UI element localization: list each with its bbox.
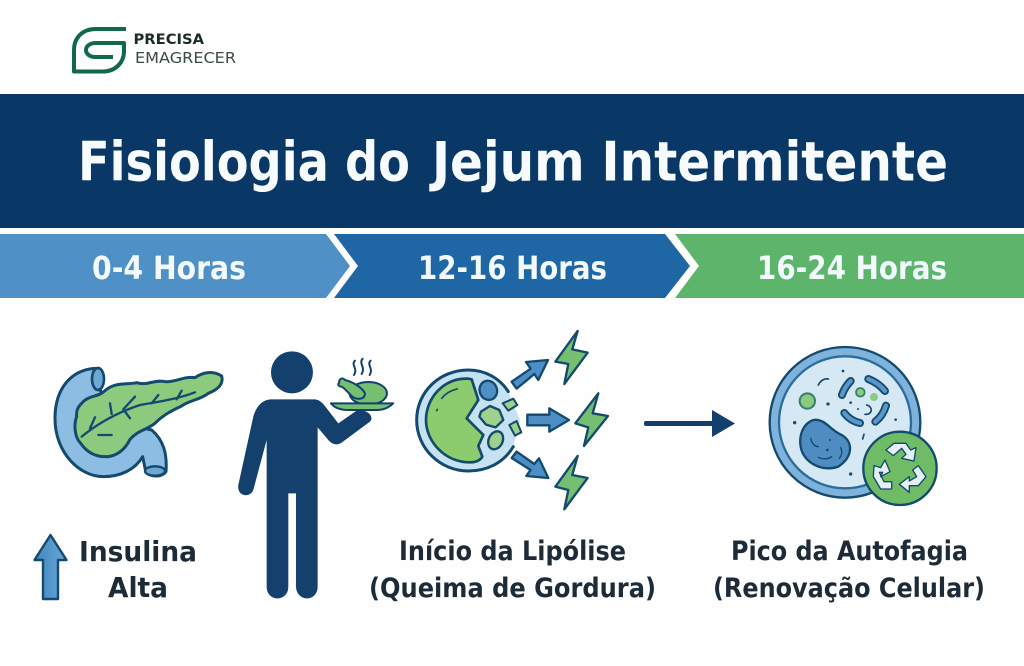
title banner xyxy=(0,94,1024,228)
arrow: progression xyxy=(644,410,735,437)
energy bolts xyxy=(555,331,608,509)
cell xyxy=(770,347,920,498)
title: Fisiologia do xyxy=(78,130,410,194)
icon: person holding tray with chicken xyxy=(238,351,393,598)
chevron: 12-16 Horas: 12-16 Horas xyxy=(418,249,607,287)
chevron: 16-24 Horas: 16-24 Horas xyxy=(757,249,947,287)
text: Insulina Alta xyxy=(79,535,197,604)
tray with chicken and steam xyxy=(331,359,393,410)
text: Insulina Alta: Insulina xyxy=(79,535,197,568)
title: Jejum Intermitente xyxy=(428,130,948,194)
recycling badge xyxy=(863,432,937,505)
icon: pancreas xyxy=(55,368,222,477)
icon: up arrow xyxy=(34,535,66,599)
fat cell xyxy=(417,370,521,471)
chevron: 12-16 Horas xyxy=(334,234,690,298)
label: Início da Lipólise: Início da Lipólise xyxy=(399,536,626,567)
label: Insulina Alta xyxy=(34,535,197,604)
label: Início da Lipólise xyxy=(369,536,656,604)
text: Insulina Alta: Alta xyxy=(108,571,168,604)
logo wordmark: EMAGRECER xyxy=(135,49,236,67)
label: Pico da Autofagia: Pico da Autofagia xyxy=(731,536,968,567)
logo: Precisa Emagrecer xyxy=(74,29,236,72)
timeline chevrons xyxy=(0,234,1024,298)
arrows xyxy=(512,360,569,478)
icon: logo leaf xyxy=(74,29,126,72)
label: Início da Lipólise: (Queima de Gordura) xyxy=(369,573,656,604)
label: Pico da Autofagia xyxy=(713,536,985,604)
person silhouette xyxy=(238,351,371,598)
chevron: 16-24 Horas xyxy=(675,234,1024,298)
icon: autophagy cell with recycling badge xyxy=(770,347,937,505)
label: Pico da Autofagia: (Renovação Celular) xyxy=(713,573,985,604)
logo wordmark xyxy=(134,32,236,67)
icon: fat cell lipolysis with arrows and energy bolts xyxy=(417,331,608,509)
title xyxy=(78,130,948,194)
logo wordmark: PRECISA xyxy=(134,32,205,48)
chevron: 0-4 Horas: 0-4 Horas xyxy=(92,249,246,287)
chevron: 0-4 Horas xyxy=(0,234,350,298)
